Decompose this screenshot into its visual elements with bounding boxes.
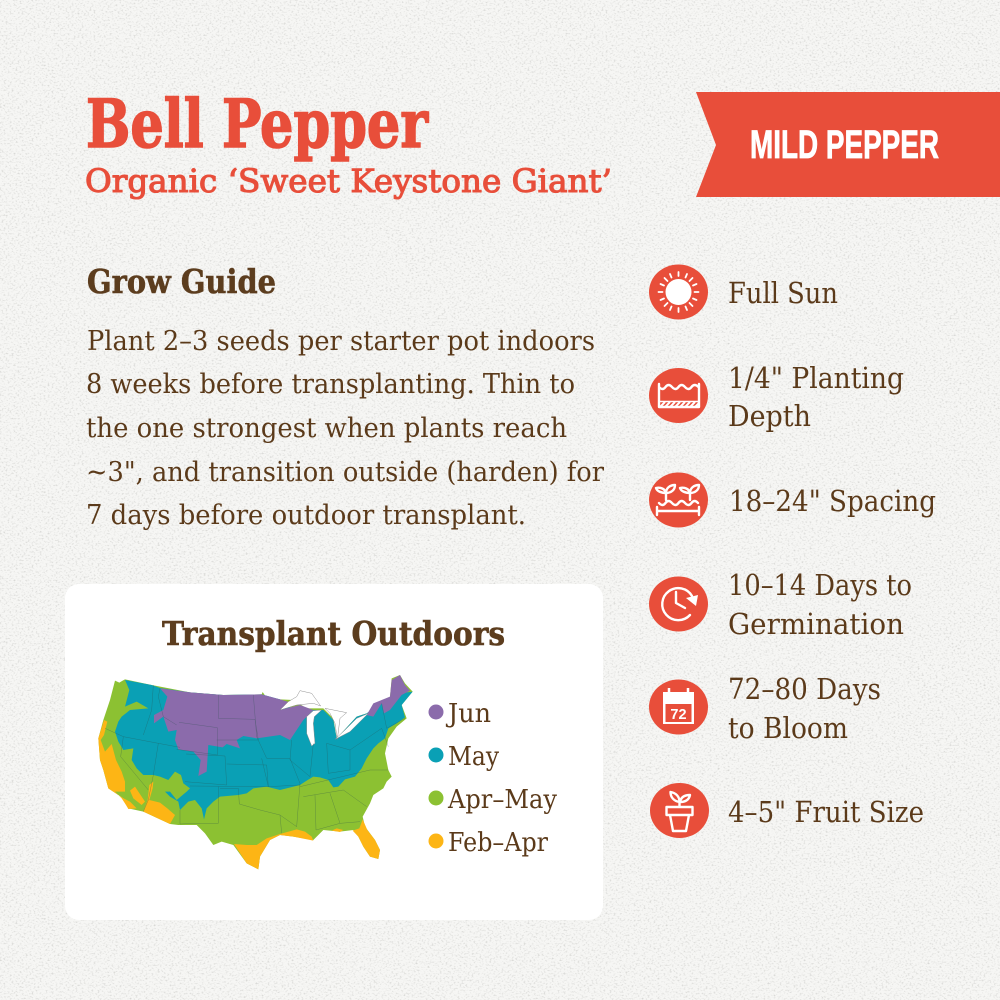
label: days to germination [728, 568, 912, 641]
icon: spacing [649, 472, 708, 528]
label: full sun: Full Sun [728, 276, 838, 310]
text block: grow guide instructions: 7 days before outdoor transplant. [86, 500, 526, 531]
legend: jun [428, 699, 491, 729]
legend: jun: Jun [445, 699, 491, 729]
label: days to germination: Germination [728, 607, 904, 641]
icon: calendar 72 [649, 680, 708, 734]
subtitle: Organic ‘Sweet Keystone Giant’ [85, 162, 612, 200]
icon: calendar 72: 72 [670, 707, 687, 723]
heading: grow guide: Grow Guide [87, 262, 276, 301]
text block: grow guide instructions: the one strongest when plants reach [86, 413, 567, 444]
label: days to bloom [728, 672, 881, 745]
label: spacing: 18–24" Spacing [729, 484, 936, 518]
map: transplant zones [98, 675, 413, 869]
label: days to bloom: to Bloom [728, 711, 848, 745]
text block: grow guide instructions: 8 weeks before transplanting. Thin to [86, 369, 575, 400]
legend: may: May [448, 742, 499, 772]
legend: feb-apr: Feb–Apr [448, 828, 549, 858]
banner: mild pepper [696, 92, 1000, 197]
label: days to bloom: 72–80 Days [728, 672, 881, 706]
text block: grow guide instructions [86, 326, 604, 531]
panel: transplant outdoors [65, 584, 603, 920]
label: planting depth [728, 361, 904, 433]
text block: grow guide instructions: ~3", and transition outside (harden) for [86, 457, 604, 488]
legend: may [428, 742, 499, 772]
label: fruit size: 4–5" Fruit Size [728, 795, 924, 829]
icon: germination clock [649, 576, 708, 632]
icon: sun [649, 264, 708, 320]
legend: apr-may: Apr–May [447, 785, 557, 815]
title: Bell Pepper [86, 85, 429, 163]
icon: planting depth [649, 368, 708, 423]
icon: fruit pot [650, 783, 709, 838]
heading: transplant outdoors: Transplant Outdoors [162, 614, 505, 653]
label: planting depth: Depth [728, 399, 811, 433]
label: days to germination: 10–14 Days to [728, 568, 912, 602]
label: planting depth: 1/4" Planting [728, 361, 904, 395]
text block: grow guide instructions: Plant 2–3 seeds per starter pot indoors [87, 326, 595, 357]
